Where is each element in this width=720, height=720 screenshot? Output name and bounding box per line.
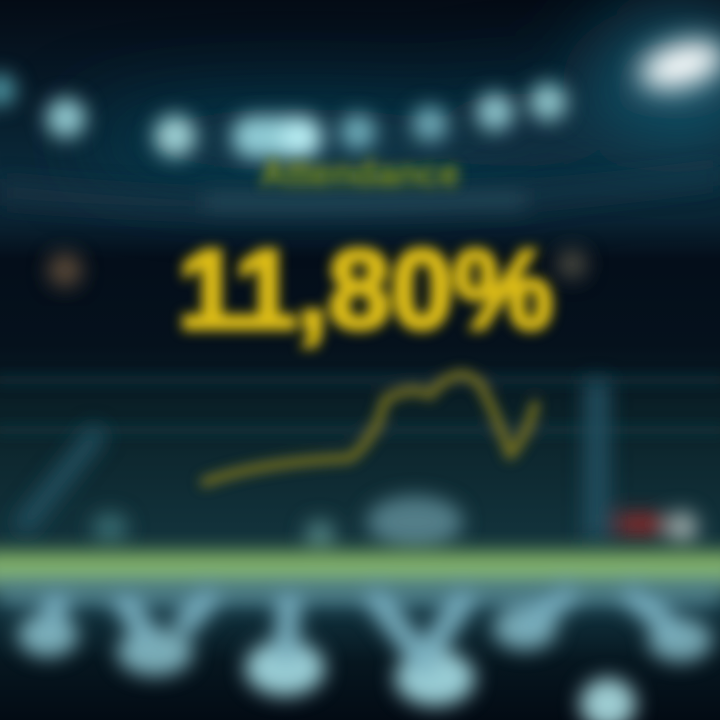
band: stand roof [0, 165, 720, 216]
floodlights: row of lamps [0, 74, 567, 158]
big figure: 11,80% [178, 227, 553, 352]
pitch side structures [20, 380, 698, 550]
line chart [0, 375, 720, 482]
side dots [48, 249, 587, 287]
glow: floodlight haze [80, 10, 720, 175]
bottom crowd light shapes [0, 588, 720, 720]
small heading: Attendance [260, 153, 460, 195]
green pitch line [0, 552, 720, 592]
floodlights [0, 32, 720, 158]
chart grid [0, 380, 720, 430]
floodlight: main upper right [634, 32, 720, 98]
